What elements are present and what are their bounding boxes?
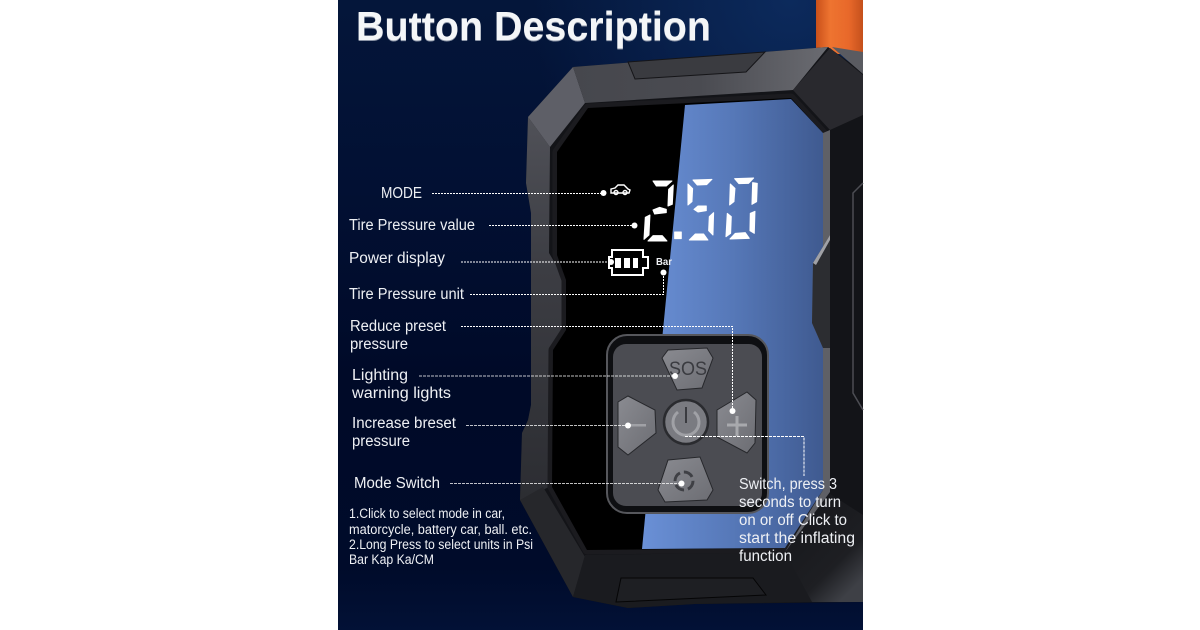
right frame strip <box>785 130 830 552</box>
bottom notch <box>616 578 766 602</box>
mode switch notes: 1.Click to select mode in car, <box>349 506 505 521</box>
callout: tire pressure value: Tire Pressure value <box>349 217 475 234</box>
callout: tire pressure unit <box>349 270 666 303</box>
left frame strip <box>520 117 565 500</box>
unit label: Bar <box>656 257 672 268</box>
callout: power switch: Switch, press 3 <box>739 476 837 493</box>
callout: power display <box>349 250 614 267</box>
title: Button Description <box>356 3 711 49</box>
lower left facet <box>520 487 585 597</box>
callout: power switch: start the inflating <box>739 530 855 547</box>
callout: increase preset pressure: pressure <box>352 433 410 450</box>
callout: lighting warning lights: Lighting <box>352 367 408 384</box>
callout: increase preset pressure <box>352 415 631 450</box>
device illustration <box>520 47 863 608</box>
callout: power display: Power display <box>349 250 445 267</box>
plus button <box>717 392 756 453</box>
right side panel line <box>853 183 863 410</box>
lower right facet <box>785 492 863 602</box>
icon: car <box>611 185 630 194</box>
lower frame <box>573 552 812 608</box>
icon: battery <box>609 250 648 275</box>
minus button <box>618 396 656 455</box>
top notch <box>628 52 765 79</box>
callout: lighting warning lights <box>351 367 678 402</box>
callout: reduce preset pressure: Reduce preset <box>350 318 447 335</box>
callout: tire pressure value <box>349 217 638 234</box>
callout: reduce preset pressure: pressure <box>350 336 408 353</box>
callout: power switch: on or off Click to <box>739 512 847 529</box>
mode switch notes: matorcycle, battery car, ball. etc. <box>349 522 532 537</box>
callout: mode <box>381 185 606 202</box>
callout: mode: MODE <box>381 185 422 202</box>
mode button <box>658 457 713 502</box>
keypad <box>607 335 768 513</box>
mode switch notes <box>349 506 533 567</box>
orange hose connector <box>816 0 863 54</box>
top left facet <box>528 67 585 147</box>
callout: reduce preset pressure <box>350 318 736 414</box>
right frame bump <box>812 235 830 348</box>
callout: power switch <box>685 436 855 565</box>
callout: lighting warning lights: warning lights <box>351 385 451 402</box>
callout: power switch: seconds to turn <box>739 494 841 511</box>
screen <box>552 98 823 550</box>
background panel <box>338 0 863 630</box>
power button <box>664 400 708 444</box>
callout: increase preset pressure: Increase breset <box>352 415 457 432</box>
SOS button: SOS <box>669 359 707 380</box>
SOS button <box>662 348 713 390</box>
callout: tire pressure unit: Tire Pressure unit <box>349 286 465 303</box>
top frame <box>573 47 828 103</box>
top right facets <box>793 48 863 130</box>
blue reflection on screen <box>642 99 823 549</box>
pressure reading digits <box>644 178 757 241</box>
mode switch notes: 2.Long Press to select units in Psi <box>349 537 533 552</box>
device body <box>520 47 863 608</box>
callout: mode switch: Mode Switch <box>354 475 440 492</box>
callout: power switch: function <box>739 548 792 565</box>
mode switch notes: Bar Kap Ka/CM <box>349 552 434 567</box>
callout: mode switch <box>354 475 684 492</box>
